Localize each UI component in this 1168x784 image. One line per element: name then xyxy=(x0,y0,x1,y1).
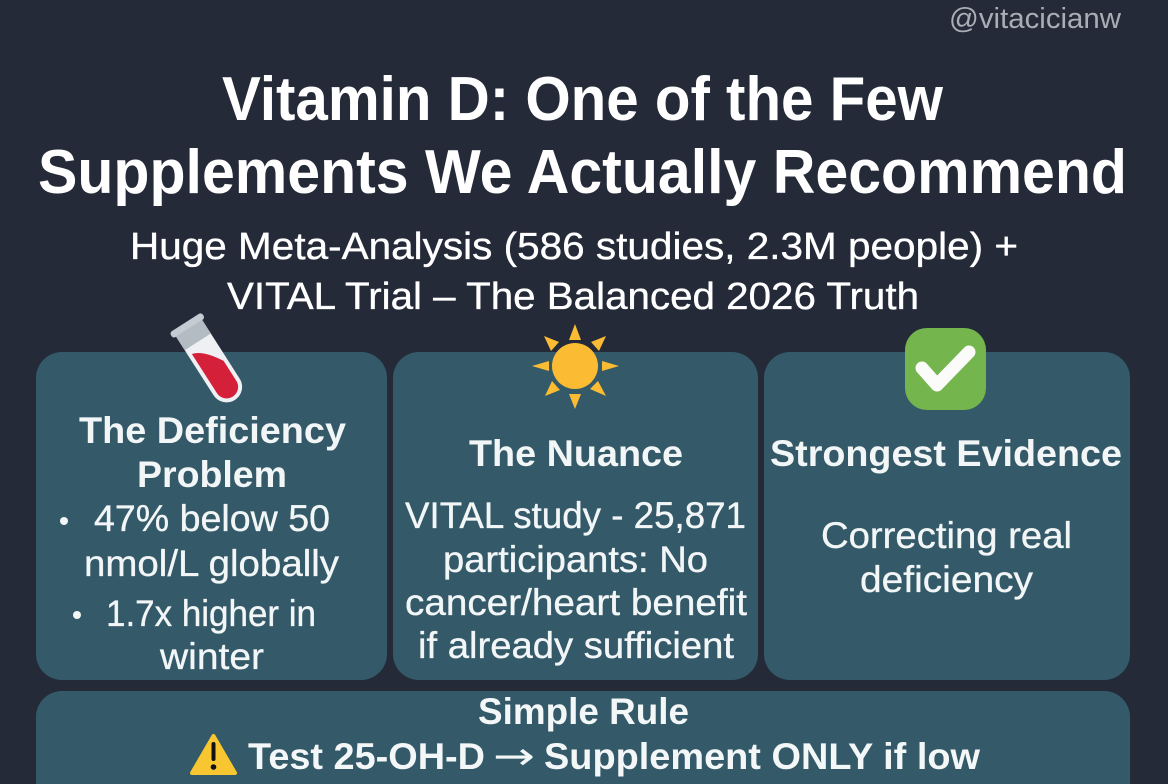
heading: the deficiency problem: The Deficiency xyxy=(79,410,346,451)
rule text: Supplement ONLY if low xyxy=(544,736,980,777)
icon: warning triangle xyxy=(192,736,235,773)
title xyxy=(38,65,1127,207)
heading: the deficiency problem xyxy=(79,410,346,495)
heading: strongest evidence: Strongest Evidence xyxy=(770,433,1122,474)
rule text xyxy=(248,734,980,778)
bullet: 47 percent below 50 nmol/L: 47% below 50 xyxy=(94,498,330,539)
heading: the nuance: The Nuance xyxy=(469,433,683,474)
body: vital study: if already sufficient xyxy=(418,625,735,666)
bullet: 1.7x higher in winter: 1.7x higher in xyxy=(106,593,316,634)
heading: simple rule: Simple Rule xyxy=(478,691,689,732)
panel: strongest evidence xyxy=(764,352,1130,680)
icon: test tube xyxy=(169,312,251,410)
panel: simple rule xyxy=(36,691,1130,784)
panel: the deficiency problem xyxy=(36,352,387,680)
bullet: 47 percent below 50 nmol/L: nmol/L globally xyxy=(84,543,340,584)
icon: sun xyxy=(532,324,619,409)
body: correcting real deficiency: deficiency xyxy=(860,559,1034,600)
icon: green check mark xyxy=(905,328,986,410)
rule text: Test 25-OH-D xyxy=(248,736,485,777)
handle watermark: @vitacicianw xyxy=(949,3,1122,35)
body: vital study xyxy=(405,495,748,666)
bullet: 1.7x higher in winter xyxy=(73,593,316,677)
subtitle xyxy=(130,226,1018,318)
bullet: 1.7x higher in winter: winter xyxy=(159,636,264,677)
rule text: → xyxy=(493,734,535,778)
body: vital study: participants: No xyxy=(443,539,708,580)
subtitle: VITAL Trial – The Balanced 2026 Truth xyxy=(227,276,919,318)
bullet: 47 percent below 50 nmol/L xyxy=(60,498,340,584)
subtitle: Huge Meta-Analysis (586 studies, 2.3M people) + xyxy=(130,226,1018,268)
panel: the nuance xyxy=(393,352,758,680)
body: vital study: VITAL study - 25,871 xyxy=(405,495,746,536)
body: vital study: cancer/heart benefit xyxy=(405,582,748,623)
title: Vitamin D: One of the Few xyxy=(222,65,944,134)
body: correcting real deficiency: Correcting real xyxy=(821,515,1072,556)
title: Supplements We Actually Recommend xyxy=(38,138,1127,207)
body: correcting real deficiency xyxy=(821,515,1072,600)
heading: the deficiency problem: Problem xyxy=(137,454,287,495)
